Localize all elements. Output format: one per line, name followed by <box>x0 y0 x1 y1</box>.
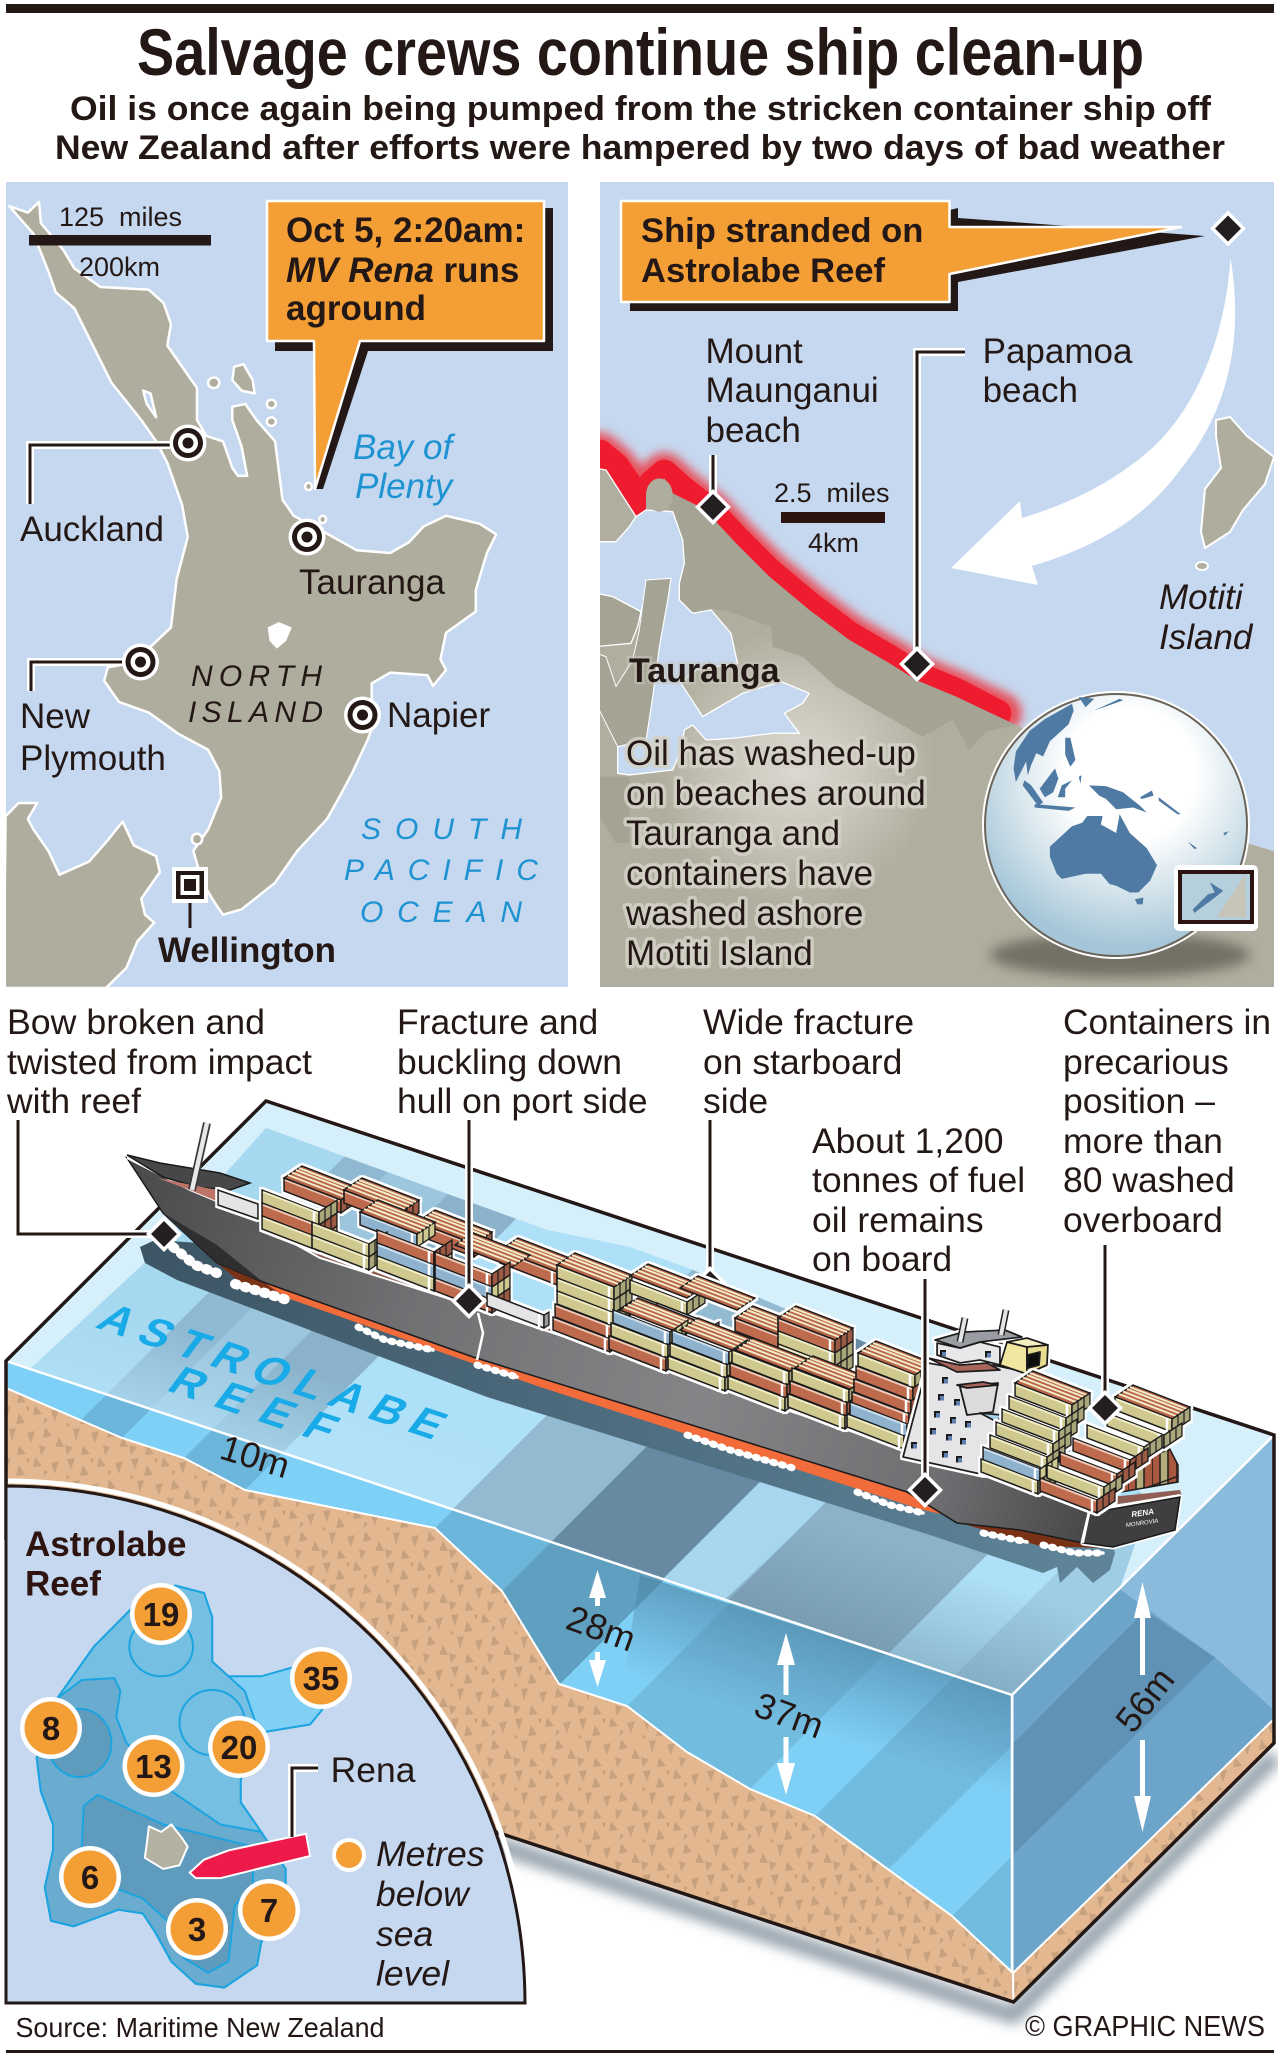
label: Mount Maunganui beach <box>695 332 879 525</box>
annotation: fuel oil: About 1,200 <box>812 1121 1003 1161</box>
label: Bay of Plenty: Bay of <box>353 428 455 467</box>
stern containers <box>981 1371 1190 1513</box>
scale bar: 125 miles 200km: 200km <box>79 252 160 282</box>
depth markers: 7 <box>260 1892 278 1929</box>
leader: bow broken <box>18 1120 182 1252</box>
callout: Oct 5 MV Rena runs aground: MV Rena runs <box>286 251 519 290</box>
funnels <box>960 1310 1006 1342</box>
land around Tauranga harbour <box>596 468 1276 990</box>
label: Papamoa beach: beach <box>983 371 1078 410</box>
label: North Island: ISLAND <box>188 696 323 729</box>
depth markers: 35 <box>303 1660 339 1697</box>
text block: oil washed up: washed ashore <box>625 894 863 933</box>
credit: © GRAPHIC NEWS <box>1025 2011 1265 2043</box>
depth label: 56m with arrows <box>1107 1582 1182 1832</box>
depth label: 37m with arrows: 37m <box>749 1684 829 1746</box>
oil slick along beaches <box>600 453 1001 713</box>
text block: oil washed up: Motiti Island <box>626 934 813 973</box>
scale bar: 125 miles 200km <box>29 202 211 282</box>
annotation: fracture and buckling <box>397 1002 648 1121</box>
Motiti Island <box>1159 417 1274 657</box>
callout: Oct 5 MV Rena runs aground: aground <box>286 289 426 328</box>
callout: Oct 5 MV Rena runs aground <box>267 201 553 489</box>
label: Tauranga: Tauranga <box>299 563 445 602</box>
depth markers: 19 <box>143 1596 179 1633</box>
label: Mount Maunganui beach: Maunganui <box>706 371 879 410</box>
label: South Pacific Ocean <box>344 813 538 929</box>
block drop shadow <box>300 1756 1275 2015</box>
label: South Pacific Ocean: SOUTH <box>361 813 522 846</box>
text block: oil washed up: Oil has washed-up <box>626 734 916 773</box>
hull crack <box>477 1313 483 1360</box>
annotation: containers: 80 washed <box>1063 1160 1235 1200</box>
label: Mount Maunganui beach: Mount <box>706 332 803 371</box>
panel: New Zealand North Island map <box>4 182 568 988</box>
annotation: fracture and buckling: Fracture and <box>397 1002 598 1042</box>
top rule <box>6 4 1274 13</box>
label: Papamoa beach <box>899 332 1133 682</box>
map land: North Island <box>4 202 496 988</box>
label: New Plymouth: Plymouth <box>20 739 166 778</box>
bottom rule <box>6 2050 1274 2053</box>
label: Auckland <box>20 424 206 549</box>
annotation: fuel oil: oil remains <box>812 1200 984 1240</box>
annotation: fuel oil: tonnes of fuel <box>812 1160 1025 1200</box>
annotation: wide fracture: on starboard <box>703 1042 902 1082</box>
globe locator <box>982 691 1258 977</box>
mast <box>192 1123 207 1190</box>
leader: wide fracture <box>692 1120 728 1302</box>
label: South Pacific Ocean: OCEAN <box>360 896 522 929</box>
ship: MV Rena <box>18 1120 1190 1553</box>
text block: oil washed up <box>625 734 926 973</box>
label: North Island: NORTH <box>191 660 322 693</box>
annotation: containers: more than <box>1063 1121 1223 1161</box>
depth markers: 6 <box>81 1859 99 1896</box>
text block: oil washed up: containers have <box>626 854 873 893</box>
label: South Pacific Ocean: PACIFIC <box>344 854 538 887</box>
sea surface <box>9 1103 1271 1694</box>
label: Tauranga: Tauranga <box>629 652 781 690</box>
panel: ship on Astrolabe Reef block diagram <box>0 1000 1278 2059</box>
legend: metres below sea level <box>332 1834 485 1994</box>
superstructure windows <box>911 1350 991 1462</box>
scale bar: 2.5 miles 4km: 2.5 miles <box>774 478 890 508</box>
scale bar: 125 miles 200km: 125 miles <box>59 202 182 232</box>
label: Napier: Napier <box>387 696 490 735</box>
callout: Ship stranded on Astrolabe Reef <box>621 201 1205 311</box>
legend: metres below sea level: Metres <box>376 1834 485 1874</box>
annotation: bow broken: with reef <box>6 1081 141 1121</box>
annotation: wide fracture: Wide fracture <box>703 1002 914 1042</box>
sand right face <box>1013 1718 1275 2002</box>
label: Bay of Plenty: Plenty <box>355 467 455 506</box>
text block: oil washed up: Tauranga and <box>626 814 840 853</box>
callout: Ship stranded on Astrolabe Reef: Ship stranded on <box>641 212 923 250</box>
callout: Oct 5 MV Rena runs aground: Oct 5, 2:20am: <box>286 211 525 250</box>
scale bar: 2.5 miles 4km <box>775 482 888 552</box>
annotation: bow broken <box>6 1002 312 1121</box>
seabed sand <box>6 1388 1014 2002</box>
legend: metres below sea level: below <box>376 1874 471 1914</box>
scale bar: 2.5 miles 4km: 4km <box>808 528 859 558</box>
leader: fracture and buckling <box>451 1120 487 1319</box>
ship shadow on water <box>140 1240 1115 1583</box>
depth label: 28m with arrows <box>561 1570 641 1687</box>
depth markers: 3 <box>188 1911 206 1948</box>
hull <box>127 1155 1182 1548</box>
hull name <box>1124 1507 1159 1529</box>
label: Papamoa beach: Papamoa <box>983 332 1133 371</box>
annotation: wide fracture <box>703 1002 914 1121</box>
block edges <box>6 1101 1274 2002</box>
label: Bay of Plenty <box>353 428 455 506</box>
source line: Source: Maritime New Zealand <box>16 2012 384 2043</box>
container stacks <box>218 1166 933 1449</box>
depth markers: 8 <box>42 1710 60 1747</box>
funnels <box>960 1310 1006 1342</box>
heading: Astrolabe Reef <box>25 1525 186 1604</box>
label: Astrolabe Reef on water: ASTROLABE <box>88 1296 456 1448</box>
waterline spray <box>358 1327 1103 1553</box>
depth markers: 20 <box>221 1729 257 1766</box>
label: Mount Maunganui beach: beach <box>706 411 801 450</box>
bow spray <box>173 1247 287 1300</box>
depth markers <box>20 1583 352 1960</box>
heading: Astrolabe Reef: Reef <box>25 1564 101 1604</box>
depth label: 56m with arrows: 56m <box>1107 1659 1182 1740</box>
superstructure <box>903 1330 1058 1475</box>
leader: fuel oil <box>907 1279 943 1508</box>
label: Auckland: Auckland <box>20 510 164 549</box>
annotation: wide fracture: side <box>703 1081 768 1121</box>
depth markers: 13 <box>135 1748 172 1785</box>
label: Astrolabe Reef on water: REEF <box>159 1359 348 1451</box>
label: North Island <box>188 660 323 729</box>
hull name: MONROVIA <box>1126 1519 1159 1529</box>
annotation: containers: overboard <box>1063 1200 1223 1240</box>
Motiti Island: Motiti <box>1159 578 1244 617</box>
leader: containers overboard <box>1087 1245 1123 1426</box>
depth label: 28m with arrows: 28m <box>561 1597 641 1659</box>
label: Tauranga <box>288 518 445 602</box>
callout: Ship stranded on Astrolabe Reef: Astrolabe Reef <box>641 252 886 290</box>
annotation: fuel oil <box>812 1121 1025 1279</box>
reef contours <box>37 1586 322 1987</box>
seabed front face water <box>8 1362 1011 1970</box>
hull name: RENA <box>1131 1507 1155 1519</box>
label: Wellington <box>158 867 336 970</box>
subtitle <box>55 90 1225 167</box>
text block: oil washed up: on beaches around <box>626 774 926 813</box>
panel: Bay of Plenty coast map <box>596 182 1276 990</box>
annotation: containers: precarious <box>1063 1042 1229 1082</box>
legend: metres below sea level: level <box>376 1954 450 1994</box>
arrow: from reef to coast <box>951 210 1246 585</box>
icon: Rena ship with label <box>190 1750 416 1878</box>
annotation: bow broken: Bow broken and <box>7 1002 265 1042</box>
annotation: fuel oil: on board <box>812 1239 952 1279</box>
depth label: 10m: 10m <box>216 1426 295 1486</box>
Motiti Island: Island <box>1159 618 1254 657</box>
heading: Astrolabe Reef: Astrolabe <box>25 1525 186 1564</box>
subtitle: Oil is once again being pumped from the stricken container ship off <box>70 90 1212 128</box>
label: New Plymouth: New <box>20 697 91 736</box>
stern container columns <box>1093 1397 1190 1497</box>
label: Wellington: Wellington <box>158 931 336 970</box>
annotation: containers: position – <box>1063 1081 1215 1121</box>
annotation: containers <box>1063 1002 1271 1240</box>
legend: metres below sea level: sea <box>376 1914 433 1954</box>
annotation: bow broken: twisted from impact <box>7 1042 312 1082</box>
panel: Astrolabe Reef inset map <box>6 1481 530 2003</box>
label: New Plymouth <box>20 644 166 778</box>
annotation: containers: Containers in <box>1063 1002 1271 1042</box>
subtitle: New Zealand after efforts were hampered by two days of bad weather <box>55 129 1225 167</box>
icon: Rena ship with label: Rena <box>331 1750 416 1790</box>
mast <box>192 1123 207 1190</box>
right face water <box>1014 1435 1275 1974</box>
annotation: fracture and buckling: buckling down <box>397 1042 622 1082</box>
annotation: fracture and buckling: hull on port side <box>397 1081 648 1121</box>
depth label: 37m with arrows <box>749 1633 829 1795</box>
